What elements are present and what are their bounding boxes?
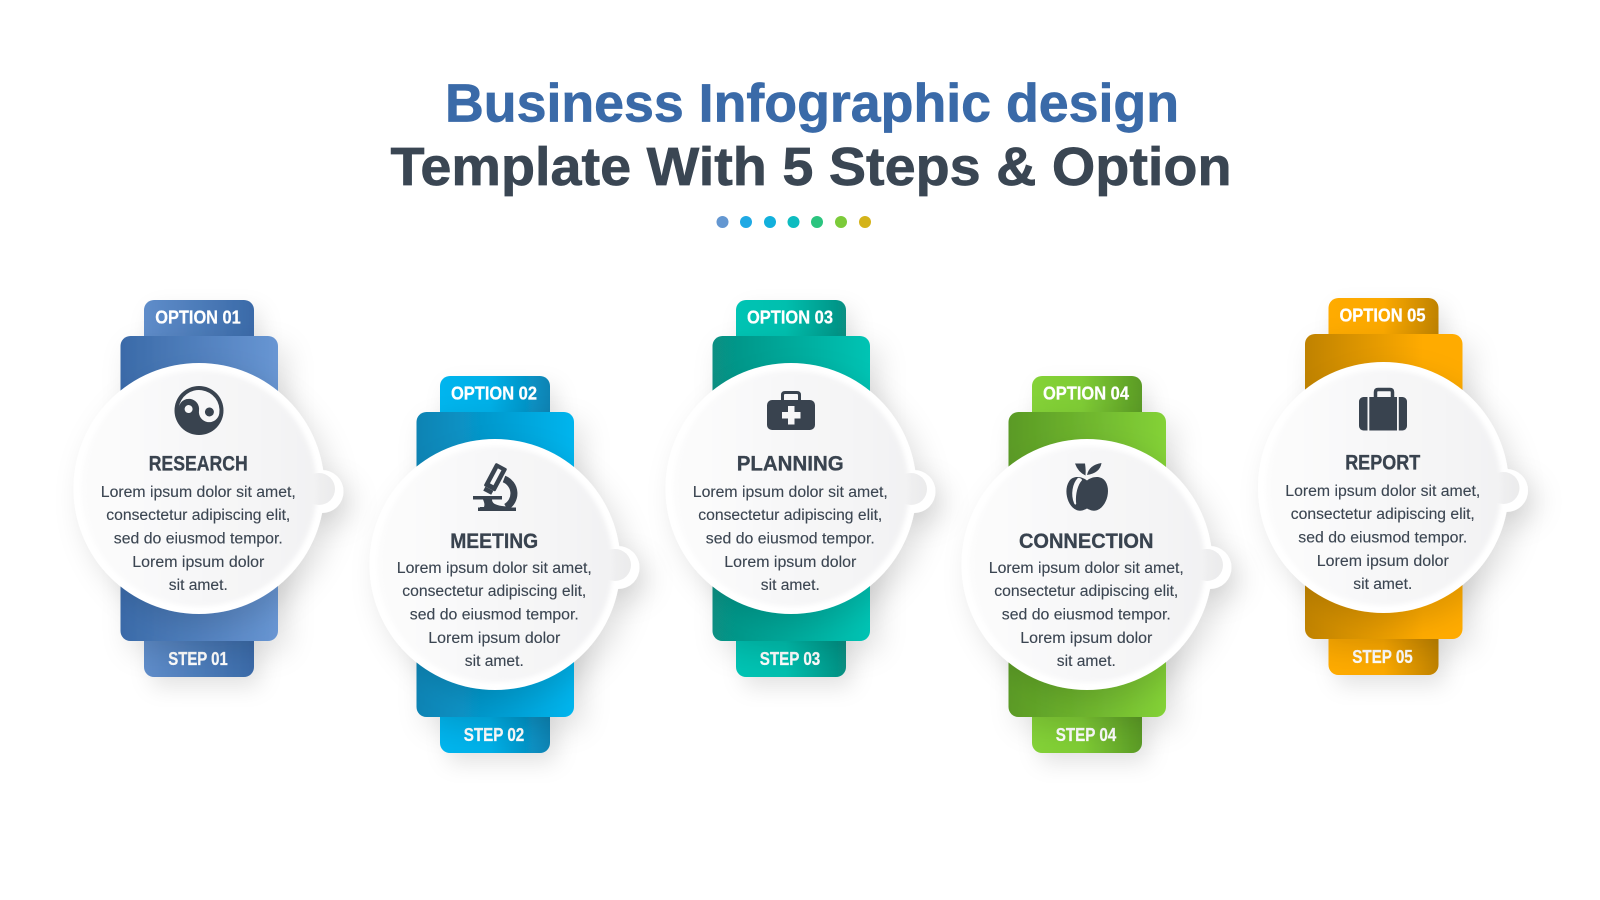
option tab 03	[736, 300, 846, 350]
step tab 04: STEP 04	[1056, 725, 1116, 745]
step tab 05	[1328, 625, 1438, 675]
title	[390, 74, 1232, 197]
dial 02	[370, 439, 640, 690]
body text 02: Lorem ipsum dolor	[428, 630, 560, 647]
option tab 01: OPTION 01	[155, 308, 241, 328]
option tab 05: OPTION 05	[1340, 306, 1426, 326]
body text 05: sit amet.	[1353, 576, 1412, 593]
body text 02: consectetur adipiscing elit,	[402, 583, 586, 600]
step tab 05: STEP 05	[1352, 647, 1413, 667]
body text 04: consectetur adipiscing elit,	[994, 583, 1178, 600]
dial 01	[74, 363, 344, 614]
heading: meeting: MEETING	[450, 530, 538, 553]
body text 01: sit amet.	[169, 577, 228, 594]
body text 01	[101, 484, 296, 594]
body text 05: Lorem ipsum dolor	[1317, 553, 1449, 570]
body text 03: sit amet.	[761, 577, 820, 594]
step tab 03: STEP 03	[760, 649, 820, 669]
body text 03: sed do eiusmod tempor.	[706, 530, 875, 547]
colored band 02	[416, 412, 574, 717]
option tab 02: OPTION 02	[451, 384, 537, 404]
decorative dots row	[716, 216, 871, 228]
body text 04: sit amet.	[1057, 653, 1116, 670]
colored band 01	[120, 336, 278, 641]
step tab 01	[144, 627, 254, 677]
body text 03: Lorem ipsum dolor	[724, 554, 856, 571]
heading: report: REPORT	[1345, 452, 1420, 474]
dial 04	[962, 439, 1232, 690]
step tab 02: STEP 02	[464, 725, 524, 745]
colored band 03	[712, 336, 870, 641]
title line 1: Business Infographic design	[445, 74, 1179, 134]
body text 04: sed do eiusmod tempor.	[1002, 606, 1171, 623]
panel: step 01 research	[74, 300, 344, 677]
body text 05: consectetur adipiscing elit,	[1291, 506, 1475, 523]
body text 04: Lorem ipsum dolor	[1020, 630, 1152, 647]
option tab 05	[1328, 298, 1438, 348]
body text 02: sit amet.	[465, 653, 524, 670]
body text 03: Lorem ipsum dolor sit amet,	[693, 484, 888, 501]
body text 04: Lorem ipsum dolor sit amet,	[989, 560, 1184, 577]
body text 05	[1285, 483, 1480, 593]
colored band 05	[1305, 334, 1462, 639]
step tab 01: STEP 01	[168, 649, 228, 669]
dial 05	[1258, 362, 1528, 613]
body text 01: Lorem ipsum dolor	[132, 554, 264, 571]
body text 02: sed do eiusmod tempor.	[410, 606, 579, 623]
option tab 04: OPTION 04	[1043, 384, 1129, 404]
option tab 03: OPTION 03	[747, 308, 833, 328]
body text 03	[693, 484, 888, 594]
title line 2: Template With 5 Steps & Option	[390, 137, 1232, 197]
option tab 02	[440, 376, 550, 426]
heading: planning: PLANNING	[737, 452, 844, 476]
body text 01: sed do eiusmod tempor.	[114, 530, 283, 547]
panel: step 05 report	[1258, 298, 1528, 675]
option tab 04	[1032, 376, 1142, 426]
panel: step 03 planning	[666, 300, 936, 677]
icon: microscope	[473, 463, 516, 511]
step tab 02	[440, 703, 550, 753]
step tab 03	[736, 627, 846, 677]
panel: step 04 connection	[962, 376, 1232, 753]
heading: research: RESEARCH	[149, 452, 248, 476]
body text 02	[397, 560, 592, 670]
body text 03: consectetur adipiscing elit,	[698, 507, 882, 524]
body text 01: consectetur adipiscing elit,	[106, 507, 290, 524]
panel: step 02 meeting	[370, 376, 640, 753]
icon: medical bag	[767, 392, 815, 430]
option tab 01	[144, 300, 254, 350]
icon: yin yang	[174, 386, 224, 435]
body text 05: Lorem ipsum dolor sit amet,	[1285, 483, 1480, 500]
icon: apple	[1066, 463, 1108, 511]
dial 03	[666, 363, 936, 614]
body text 01: Lorem ipsum dolor sit amet,	[101, 484, 296, 501]
step tab 04	[1032, 703, 1142, 753]
heading: connection: CONNECTION	[1019, 530, 1153, 553]
body text 05: sed do eiusmod tempor.	[1298, 529, 1467, 546]
body text 02: Lorem ipsum dolor sit amet,	[397, 560, 592, 577]
body text 04	[989, 560, 1184, 670]
icon: briefcase	[1359, 390, 1407, 430]
colored band 04	[1008, 412, 1166, 717]
